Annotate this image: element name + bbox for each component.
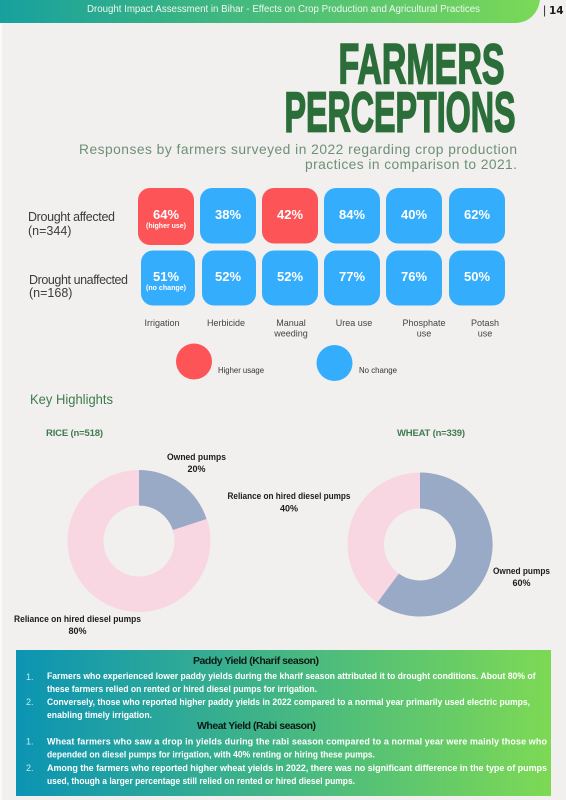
card: affected manual weeding: 42% [277, 207, 303, 222]
rice label: owned pumps: Owned pumps [167, 452, 226, 462]
card: unaffected potash [449, 250, 505, 306]
wheat findings: used, though a larger percentage still relied on rented or hired diesel pumps. [47, 776, 355, 786]
card: affected irrigation: (higher use) [146, 223, 186, 230]
card: unaffected manual weeding: 52% [277, 269, 303, 284]
rice label: owned pumps: 20% [187, 464, 206, 474]
card: affected phosphate: 40% [401, 207, 427, 222]
card: affected herbicide: 38% [215, 207, 241, 222]
card: unaffected manual weeding [262, 250, 318, 306]
subtitle: Responses by farmers surveyed in 2022 regarding crop production [79, 142, 517, 157]
row label: drought affected [28, 210, 115, 238]
page number [543, 3, 564, 17]
page number: | [543, 3, 546, 17]
rice donut chart [14, 428, 226, 636]
heading: paddy yield: Paddy Yield (Kharif season) [193, 655, 319, 667]
wheat findings: 1. [26, 736, 34, 746]
rice label: hired diesel pumps: 80% [68, 626, 87, 636]
paddy findings: 2. [26, 697, 34, 707]
card: unaffected irrigation: (no change) [146, 285, 186, 292]
row label: drought affected: (n=344) [28, 224, 71, 238]
wheat findings: 2. [26, 763, 34, 773]
row label: drought unaffected: (n=168) [29, 286, 72, 300]
wheat findings: depended on diesel pumps for irrigation, with 40% renting or hiring these pumps. [47, 750, 375, 760]
rice label: hired diesel pumps [14, 614, 141, 636]
wheat label: hired diesel pumps [228, 491, 350, 514]
wheat heading: WHEAT (n=339) [397, 428, 465, 439]
wheat donut [347, 472, 493, 616]
wheat label: owned pumps [493, 566, 550, 588]
wheat label: hired diesel pumps: 40% [280, 504, 298, 514]
card: unaffected potash: 50% [464, 269, 490, 284]
title [284, 32, 516, 144]
legend: higher usage: Higher usage [218, 365, 264, 375]
paddy findings: enabling timely irrigation. [47, 710, 152, 720]
card: unaffected irrigation: 51% [153, 269, 179, 284]
column labels: Urea use [336, 318, 372, 328]
wheat findings: Wheat farmers who saw a drop in yields during the rabi season compared to a normal year were mainly those who [47, 736, 548, 746]
column labels: Manual [276, 318, 306, 328]
paddy findings: Conversely, those who reported higher paddy yields in 2022 compared to a normal year primarily used electric pumps, [47, 697, 530, 707]
rice label: hired diesel pumps: Reliance on hired diesel pumps [14, 614, 141, 624]
card: affected urea: 84% [339, 207, 365, 222]
card: unaffected phosphate [386, 250, 442, 306]
card: affected manual weeding [262, 188, 318, 244]
column labels [144, 318, 499, 338]
card: unaffected herbicide: 52% [215, 269, 241, 284]
card: affected urea [324, 188, 380, 244]
card: affected potash [449, 188, 505, 244]
page number: 14 [549, 5, 564, 17]
subtitle: practices in comparison to 2021. [305, 157, 517, 172]
card: unaffected urea: 77% [339, 269, 365, 284]
wheat label: hired diesel pumps: Reliance on hired diesel pumps [228, 491, 350, 501]
wheat label: owned pumps: Owned pumps [493, 566, 550, 576]
key highlights heading: Key Highlights [30, 391, 113, 407]
card: affected phosphate [386, 188, 442, 244]
rice label: owned pumps [167, 452, 226, 474]
column labels: Herbicide [207, 318, 245, 328]
paddy findings: these farmers relied on rented or hired diesel pumps for irrigation. [47, 684, 317, 694]
paddy findings: 1. [26, 672, 34, 682]
rice heading: RICE (n=518) [46, 428, 103, 439]
wheat label: owned pumps: 60% [512, 578, 531, 588]
row label: drought unaffected [29, 273, 128, 300]
card: affected potash: 62% [464, 207, 490, 222]
paddy findings: Farmers who experienced lower paddy yields during the kharif season attributed it to drought conditions. About 80% of [47, 671, 536, 681]
wheat findings: Among the farmers who reported higher wheat yields in 2022, there was no significant difference in the type of pumps [47, 763, 547, 773]
heat grid [138, 188, 505, 306]
card: affected irrigation [138, 188, 194, 245]
card: affected herbicide [200, 188, 256, 244]
column labels: use [478, 328, 492, 338]
card: unaffected phosphate: 76% [401, 269, 427, 284]
paddy findings [26, 671, 536, 720]
card: affected irrigation: 64% [153, 207, 179, 222]
column labels: weeding [273, 328, 308, 338]
column labels: Potash [471, 318, 499, 328]
card: unaffected herbicide [202, 250, 256, 306]
card: unaffected irrigation [141, 250, 195, 306]
header bar [0, 0, 540, 23]
row label: drought unaffected: Drought unaffected [29, 273, 128, 287]
column labels: Phosphate [402, 318, 446, 328]
row label: drought affected: Drought affected [28, 210, 115, 224]
heading: wheat yield: Wheat Yield (Rabi season) [197, 720, 316, 732]
legend: higher usage [176, 344, 264, 380]
rice donut [68, 470, 210, 612]
header bar: Drought Impact Assessment in Bihar - Effects on Crop Production and Agricultural Practices [87, 4, 480, 15]
summary panel [16, 650, 551, 796]
column labels: use [417, 328, 431, 338]
legend: no change [316, 345, 397, 381]
wheat donut chart [228, 428, 550, 616]
wheat findings [26, 736, 548, 786]
legend: no change: No change [359, 365, 397, 375]
column labels: Irrigation [144, 318, 180, 328]
subtitle [79, 142, 517, 172]
card: unaffected urea [324, 250, 380, 306]
